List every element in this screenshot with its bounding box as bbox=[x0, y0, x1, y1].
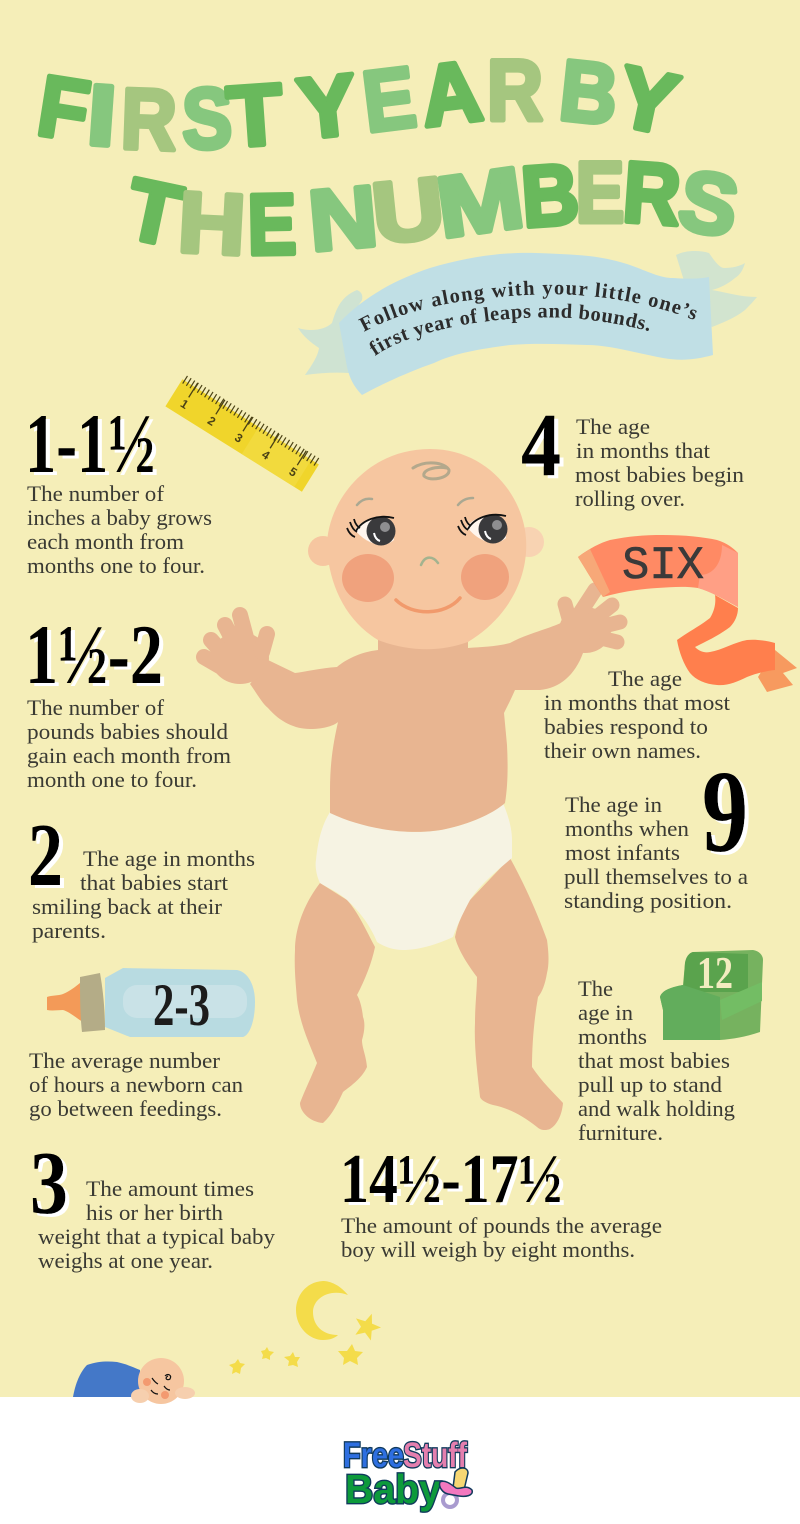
description: The number of bbox=[27, 481, 165, 506]
description: smiling back at their bbox=[32, 894, 223, 919]
title line: The Numbers: N bbox=[305, 168, 381, 270]
title line: The Numbers: T bbox=[118, 161, 189, 265]
cheeks bbox=[342, 554, 509, 602]
description bbox=[341, 1213, 662, 1262]
stat: 3 times: 3 bbox=[30, 1134, 68, 1233]
title line: First Year By: I bbox=[84, 67, 120, 165]
stat: 12 months: and walk holding bbox=[578, 1096, 735, 1121]
bottle collar bbox=[80, 973, 105, 1032]
description: weighs at one year. bbox=[38, 1248, 213, 1273]
title line: First Year By: F bbox=[32, 56, 96, 160]
description: The age in bbox=[565, 792, 662, 817]
stat: 12 months: pull up to stand bbox=[578, 1072, 722, 1097]
description: months one to four. bbox=[27, 553, 205, 578]
stat: 12 months: furniture. bbox=[578, 1120, 663, 1145]
description: gain each month from bbox=[27, 743, 231, 768]
icon: ruler: 2 bbox=[205, 413, 218, 429]
ribbon streamer bbox=[677, 595, 775, 685]
stars bbox=[229, 1314, 381, 1374]
left eye bbox=[347, 516, 396, 546]
title line: The Numbers: M bbox=[431, 150, 530, 257]
title line: First Year By: A bbox=[415, 42, 487, 145]
ribbon right tail bbox=[676, 251, 757, 327]
description: parents. bbox=[32, 918, 106, 943]
blanket bbox=[73, 1361, 140, 1397]
stat: 4 months bbox=[521, 396, 744, 511]
title line: First Year By: Y bbox=[293, 56, 361, 158]
description: most babies begin bbox=[575, 462, 744, 487]
description: inches a baby grows bbox=[27, 505, 212, 530]
six label: SIX bbox=[622, 540, 704, 592]
title bbox=[32, 41, 745, 273]
ribbon text bbox=[358, 280, 697, 356]
left leg bbox=[295, 883, 375, 1123]
title line: The Numbers: E bbox=[247, 176, 297, 273]
description: The number of bbox=[27, 695, 165, 720]
title line: First Year By: R bbox=[120, 71, 178, 169]
bottle body bbox=[105, 968, 255, 1037]
stat: 6 months: their own names. bbox=[544, 738, 701, 763]
ribbon streamer tail bbox=[758, 650, 797, 692]
description bbox=[32, 846, 255, 943]
sleeping cheeks bbox=[143, 1378, 169, 1399]
hair curl bbox=[413, 463, 449, 479]
logo: Free Stuff Baby: Stuff bbox=[403, 1436, 467, 1475]
stat: 6 months: The age bbox=[608, 666, 682, 691]
stat: 9 months bbox=[564, 746, 748, 913]
description: weight that a typical baby bbox=[38, 1224, 275, 1249]
title line: The Numbers bbox=[118, 143, 745, 273]
description: The amount times bbox=[86, 1176, 254, 1201]
sleeping hands bbox=[131, 1387, 195, 1403]
stat: 1.5 to 2 pounds: 1½-2 bbox=[25, 608, 163, 702]
title line: The Numbers: B bbox=[518, 145, 582, 246]
pacifier bbox=[440, 1468, 472, 1507]
sleeping face lines bbox=[151, 1375, 171, 1394]
description: months when bbox=[565, 816, 689, 841]
title line: The Numbers: E bbox=[576, 144, 624, 240]
right ear bbox=[514, 527, 544, 557]
torso and arms bbox=[250, 618, 598, 832]
icon: moon and stars bbox=[229, 1281, 381, 1374]
stat: 12 months: months bbox=[578, 1024, 647, 1049]
moon bbox=[296, 1281, 348, 1340]
title line: First Year By: R bbox=[487, 43, 543, 139]
stat: 2 to 3 hours: of hours a newborn can bbox=[29, 1072, 243, 1097]
armchair number: 12 bbox=[697, 948, 733, 998]
left ear bbox=[308, 536, 338, 566]
icon: ruler: 4 bbox=[259, 447, 273, 463]
icon: sleeping baby bbox=[73, 1358, 195, 1404]
icon: ruler: 5 bbox=[286, 464, 300, 480]
mouth bbox=[396, 598, 460, 612]
description bbox=[575, 414, 744, 511]
stat: 12 months: The bbox=[578, 976, 613, 1001]
icon: ruler bbox=[165, 375, 322, 492]
ribbon main bbox=[339, 253, 713, 395]
title line: First Year By bbox=[32, 41, 686, 169]
title line: The Numbers: R bbox=[620, 143, 684, 244]
description: each month from bbox=[27, 529, 184, 554]
ribbon banner bbox=[298, 251, 757, 395]
title line: The Numbers: H bbox=[176, 173, 248, 273]
title line: First Year By: T bbox=[224, 65, 286, 165]
diaper bbox=[316, 803, 512, 950]
nose bbox=[421, 558, 438, 565]
icon: ruler: 3 bbox=[232, 430, 246, 446]
stat: 6 months bbox=[544, 666, 730, 763]
title line: First Year By: Y bbox=[609, 48, 686, 154]
description: pull themselves to a bbox=[564, 864, 748, 889]
title line: The Numbers: U bbox=[368, 159, 449, 262]
description: The age bbox=[576, 414, 650, 439]
title line: First Year By: B bbox=[555, 41, 622, 143]
description: in months that bbox=[576, 438, 710, 463]
left hand bbox=[204, 615, 269, 684]
logo: Free Stuff Baby bbox=[343, 1436, 472, 1512]
right eye bbox=[458, 514, 508, 544]
stat: 9 months: 9 bbox=[702, 746, 748, 877]
description bbox=[38, 1176, 275, 1273]
stat: 2 to 3 hours: The average number bbox=[29, 1048, 221, 1073]
stat: 2 months bbox=[28, 806, 255, 943]
description: boy will weigh by eight months. bbox=[341, 1237, 635, 1262]
title line: First Year By: S bbox=[181, 71, 233, 168]
stat: 4 months: 4 bbox=[521, 396, 561, 495]
right leg bbox=[455, 858, 563, 1130]
stat: 1 to 1.5 inches: 1-1½ bbox=[25, 397, 155, 491]
eyebrows bbox=[357, 498, 473, 505]
stat: 2 to 3 hours bbox=[29, 1048, 243, 1121]
logo: Free Stuff Baby: Free bbox=[343, 1436, 404, 1475]
stat: 14.5 to 17.5 pounds bbox=[340, 1141, 662, 1262]
stat: 2 months: 2 bbox=[28, 806, 63, 905]
ribbon text: first year of leaps and bounds. bbox=[370, 304, 649, 356]
footer band bbox=[0, 1397, 800, 1524]
stat: 6 months: in months that most bbox=[544, 690, 730, 715]
description bbox=[27, 481, 212, 578]
title line: The Numbers: S bbox=[672, 152, 745, 256]
stat: 3 times bbox=[30, 1134, 275, 1273]
description: month one to four. bbox=[27, 767, 197, 792]
stat: 12 months: age in bbox=[578, 1000, 633, 1025]
description: most infants bbox=[565, 840, 680, 865]
right hand bbox=[559, 590, 620, 653]
description: standing position. bbox=[564, 888, 732, 913]
title line: First Year By: E bbox=[358, 49, 421, 151]
bottle teat bbox=[47, 983, 83, 1022]
stat: 1.5 to 2 pounds bbox=[25, 608, 231, 792]
icon: armchair bbox=[660, 948, 763, 1040]
ribbon text: Follow along with your little one’s bbox=[358, 280, 697, 332]
ribbon band bbox=[578, 535, 738, 607]
icon: bottle bbox=[47, 968, 255, 1038]
bottle label: 2-3 bbox=[153, 972, 210, 1038]
ribbon left tail bbox=[298, 290, 362, 375]
sleeping head bbox=[138, 1358, 184, 1404]
baby illustration bbox=[204, 449, 620, 1130]
logo: Free Stuff Baby: Baby bbox=[345, 1466, 441, 1512]
description bbox=[27, 695, 231, 792]
description: The age in months bbox=[83, 846, 255, 871]
stat: 12 months bbox=[578, 976, 735, 1145]
description: that babies start bbox=[80, 870, 228, 895]
icon: six ribbon bbox=[578, 535, 797, 692]
description bbox=[564, 792, 748, 913]
description: The amount of pounds the average bbox=[341, 1213, 662, 1238]
icon: ruler: 1 bbox=[178, 396, 191, 412]
stat: 14.5 to 17.5 pounds: 14½-17½ bbox=[340, 1141, 562, 1218]
stat: 2 to 3 hours: go between feedings. bbox=[29, 1096, 222, 1121]
description: rolling over. bbox=[575, 486, 685, 511]
stat: 6 months: babies respond to bbox=[544, 714, 708, 739]
stat: 12 months: that most babies bbox=[578, 1048, 730, 1073]
stat: 1 to 1.5 inches bbox=[25, 397, 212, 578]
description: pounds babies should bbox=[27, 719, 228, 744]
head bbox=[327, 449, 526, 649]
description: his or her birth bbox=[86, 1200, 223, 1225]
